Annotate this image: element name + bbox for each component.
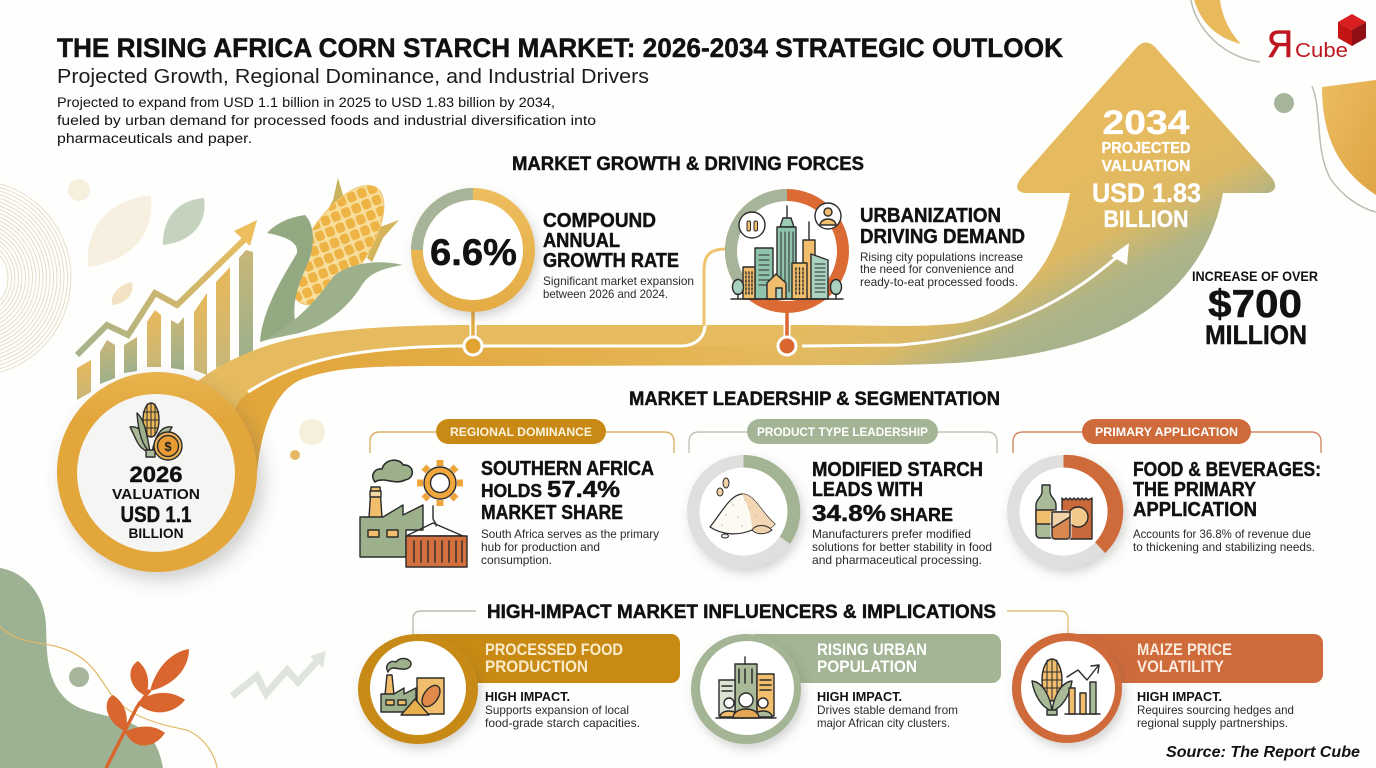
panel: primary application: Accounts for 36.8% of revenue due [1133, 527, 1311, 541]
panel: product type leadership: solutions for better stability in food [812, 540, 992, 554]
panel: regional dominance: South Africa serves as the primary [481, 527, 659, 541]
start node: 2026 valuation: 2026 [130, 462, 182, 487]
ribbon: growth path into arrow [157, 42, 1275, 472]
panel: product type leadership: MODIFIED STARCH [812, 459, 983, 481]
heading: high-impact influencers: HIGH-IMPACT MARKET INFLUENCERS & IMPLICATIONS [487, 602, 996, 623]
source note: Source: The Report Cube [1166, 744, 1360, 761]
decoration: concentric circles [0, 180, 71, 376]
arrow label: 2034 projected valuation: BILLION [1104, 206, 1188, 233]
text: CAGR [543, 210, 694, 301]
callout: increase of over $700 million [1192, 268, 1318, 350]
card: maize price volatility: regional supply partnerships. [1137, 716, 1288, 730]
card: maize price volatility: MAIZE PRICE [1137, 640, 1232, 659]
card: maize price volatility: VOLATILITY [1137, 657, 1225, 676]
icon: food and beverage [1036, 485, 1092, 539]
start node: 2026 valuation: $ [164, 439, 172, 454]
heading: market leadership: MARKET LEADERSHIP & SEGMENTATION [629, 389, 1000, 410]
chart: 34.8% ring [687, 455, 800, 568]
text: urbanization: ready-to-eat processed foods. [860, 275, 1018, 289]
subtitle: Projected Growth, Regional Dominance, and Industrial Drivers [57, 66, 649, 88]
decoration: bottom left sage blob and branch [0, 568, 217, 768]
text: CAGR: Significant market expansion [543, 274, 694, 288]
decoration: top right shapes [1191, 0, 1376, 212]
text: CAGR: between 2026 and 2024. [543, 287, 668, 301]
panel: product type leadership: and pharmaceutical processing. [812, 553, 982, 567]
arrow label: 2034 projected valuation: USD 1.83 [1092, 178, 1201, 208]
text: CAGR: ANNUAL [543, 230, 620, 252]
card: maize price volatility [1012, 633, 1323, 743]
panel: product type leadership: LEADS WITH [812, 479, 923, 501]
heading: market growth: MARKET GROWTH & DRIVING FORCES [512, 154, 864, 175]
panel: primary application [1007, 419, 1321, 568]
logo: RCube: Cube [1295, 39, 1348, 62]
icon: starch powder [710, 478, 775, 538]
card: rising urban population: POPULATION [817, 657, 917, 676]
panel: product type leadership: SHARE [890, 505, 953, 525]
decoration: pale leaves and dots [68, 179, 325, 460]
text: urbanization: URBANIZATION [860, 205, 1001, 227]
illustration: corn cob [260, 171, 403, 342]
intro paragraph: pharmaceuticals and paper. [57, 131, 252, 146]
milestone: CAGR ring: 6.6% [430, 232, 517, 273]
icon: factory and food [381, 658, 444, 715]
start node: 2026 valuation: BILLION [128, 525, 184, 541]
card: processed food production: Supports expansion of local [485, 703, 629, 717]
text: urbanization [860, 205, 1025, 289]
panel: regional dominance [360, 419, 674, 567]
milestone: urbanization ring [725, 189, 849, 355]
icon: corn and coin [130, 403, 182, 460]
text: urbanization: Rising city populations increase [860, 250, 1023, 264]
panel: primary application: FOOD & BEVERAGES: [1133, 459, 1321, 481]
arrow label: 2034 projected valuation: PROJECTED [1102, 140, 1190, 157]
panel: primary application: THE PRIMARY [1133, 479, 1257, 501]
text: urbanization: DRIVING DEMAND [860, 226, 1025, 248]
intro paragraph: fueled by urban demand for processed foods and industrial diversification into [57, 113, 596, 128]
callout: increase of over $700 million: $700 [1208, 283, 1302, 326]
start node: 2026 valuation: VALUATION [112, 486, 200, 503]
text: urbanization: the need for convenience and [860, 262, 1014, 276]
intro paragraph [57, 95, 596, 146]
card: rising urban population: Drives stable demand from [817, 703, 958, 717]
chart: rising bars and arrow [77, 220, 257, 400]
card: maize price volatility: Requires sourcing hedges and [1137, 703, 1294, 717]
arrow label: 2034 projected valuation [1092, 104, 1201, 233]
chart: 36.8% ring [1007, 455, 1123, 568]
panel: regional dominance: SOUTHERN AFRICA [481, 458, 654, 480]
intro paragraph: Projected to expand from USD 1.1 billion in 2025 to USD 1.83 billion by 2034, [57, 95, 555, 110]
decoration: faint growth arrow [232, 651, 326, 696]
callout: increase of over $700 million: MILLION [1205, 320, 1307, 350]
card: maize price volatility: HIGH IMPACT. [1137, 689, 1222, 704]
panel: product type leadership: Manufacturers prefer modified [812, 527, 971, 541]
panel: regional dominance: REGIONAL DOMINANCE [450, 425, 592, 439]
icon: city skyline [731, 203, 843, 299]
card: processed food production: PROCESSED FOOD [485, 640, 623, 659]
connector: ribbon to urbanization ring [704, 249, 726, 326]
panel: primary application: APPLICATION [1133, 499, 1257, 521]
panel: regional dominance: consumption. [481, 553, 552, 567]
callout: increase of over $700 million: INCREASE OF OVER [1192, 268, 1318, 284]
connector: left heading bracket [413, 611, 476, 636]
card: processed food production: HIGH IMPACT. [485, 689, 570, 704]
card: processed food production [358, 634, 680, 744]
card: processed food production: PRODUCTION [485, 657, 588, 676]
title: THE RISING AFRICA CORN STARCH MARKET: 2026-2034 STRATEGIC OUTLOOK [57, 33, 1063, 63]
start node: 2026 valuation [57, 372, 257, 572]
arrow label: 2034 projected valuation: 2034 [1102, 104, 1190, 142]
text: CAGR: COMPOUND [543, 210, 656, 232]
card: rising urban population: major African city clusters. [817, 716, 950, 730]
icon: corn and price chart [1032, 659, 1100, 715]
arrow label: 2034 projected valuation: VALUATION [1102, 158, 1190, 175]
card: rising urban population: HIGH IMPACT. [817, 689, 902, 704]
panel: product type leadership: PRODUCT TYPE LEADERSHIP [757, 425, 928, 439]
panel: primary application: PRIMARY APPLICATION [1095, 425, 1238, 439]
panel: primary application: to thickening and stabilizing needs. [1133, 540, 1315, 554]
icon: people and city [716, 657, 776, 718]
connector: right heading bracket [1007, 611, 1068, 636]
text: CAGR: GROWTH RATE [543, 250, 679, 272]
card: rising urban population [691, 634, 1001, 744]
panel: regional dominance: 57.4% [547, 476, 620, 502]
panel: product type leadership: 34.8% [812, 500, 886, 526]
icon: factory and container [360, 460, 467, 567]
card: rising urban population: RISING URBAN [817, 640, 927, 659]
logo: RCube: Я [1267, 24, 1293, 66]
panel: regional dominance: MARKET SHARE [481, 502, 623, 524]
milestone: CAGR ring [411, 188, 535, 355]
panel: regional dominance: HOLDS [481, 481, 542, 501]
logo: RCube [1267, 14, 1366, 66]
panel: product type leadership [687, 419, 997, 568]
start node: 2026 valuation: USD 1.1 [120, 502, 192, 527]
panel: regional dominance: hub for production and [481, 540, 600, 554]
card: processed food production: food-grade starch capacities. [485, 716, 640, 730]
